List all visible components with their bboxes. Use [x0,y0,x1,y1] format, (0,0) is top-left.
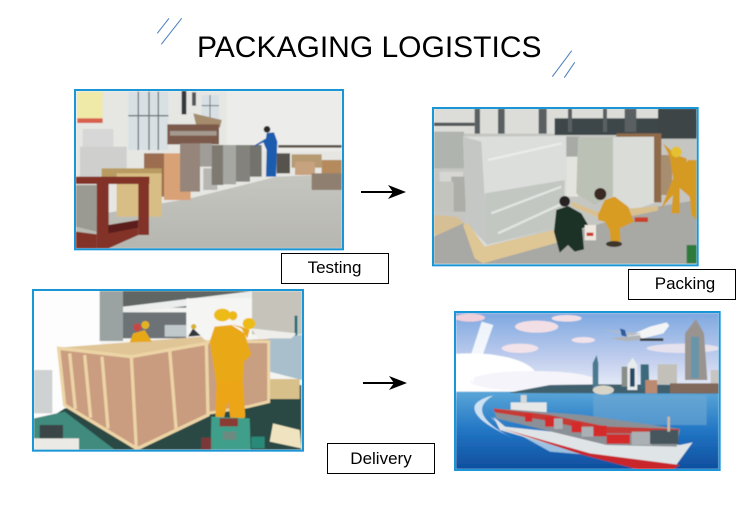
photo panel: wooden crates [33,290,303,451]
crate front [131,343,208,448]
red cart [76,177,149,248]
main worker [214,309,231,321]
wake [474,396,513,438]
green machine [211,417,251,450]
arrow: packaging to delivery [363,376,407,390]
title: PACKAGING LOGISTICS [197,31,542,64]
worker [264,126,270,133]
containers [493,408,680,447]
label: Testing: Testing [308,258,361,277]
standing workers [661,155,672,195]
label: Packing: Packing [655,274,715,293]
background workers [133,323,141,331]
back crate [205,339,269,413]
photo panel: testing workshop [75,90,343,249]
label: Testing [282,254,388,284]
ship hull [493,417,693,469]
arrow: testing to packing [361,185,406,199]
label: Delivery: Delivery [350,449,412,468]
crate top [64,336,210,356]
crouching worker [594,188,606,200]
other helmets [231,324,250,338]
reflection [593,395,707,425]
photo panel: delivery ship and plane [454,311,721,471]
kneeling worker [559,196,570,207]
city skyline [510,384,719,394]
label: Delivery [328,444,434,474]
superstructure [511,402,547,412]
photo panel: packing [433,108,698,265]
plane [602,322,669,341]
label: Packing [628,270,736,300]
decorative slashes top left [157,18,182,44]
decorative slashes top right [552,51,575,78]
crate side [59,348,136,448]
